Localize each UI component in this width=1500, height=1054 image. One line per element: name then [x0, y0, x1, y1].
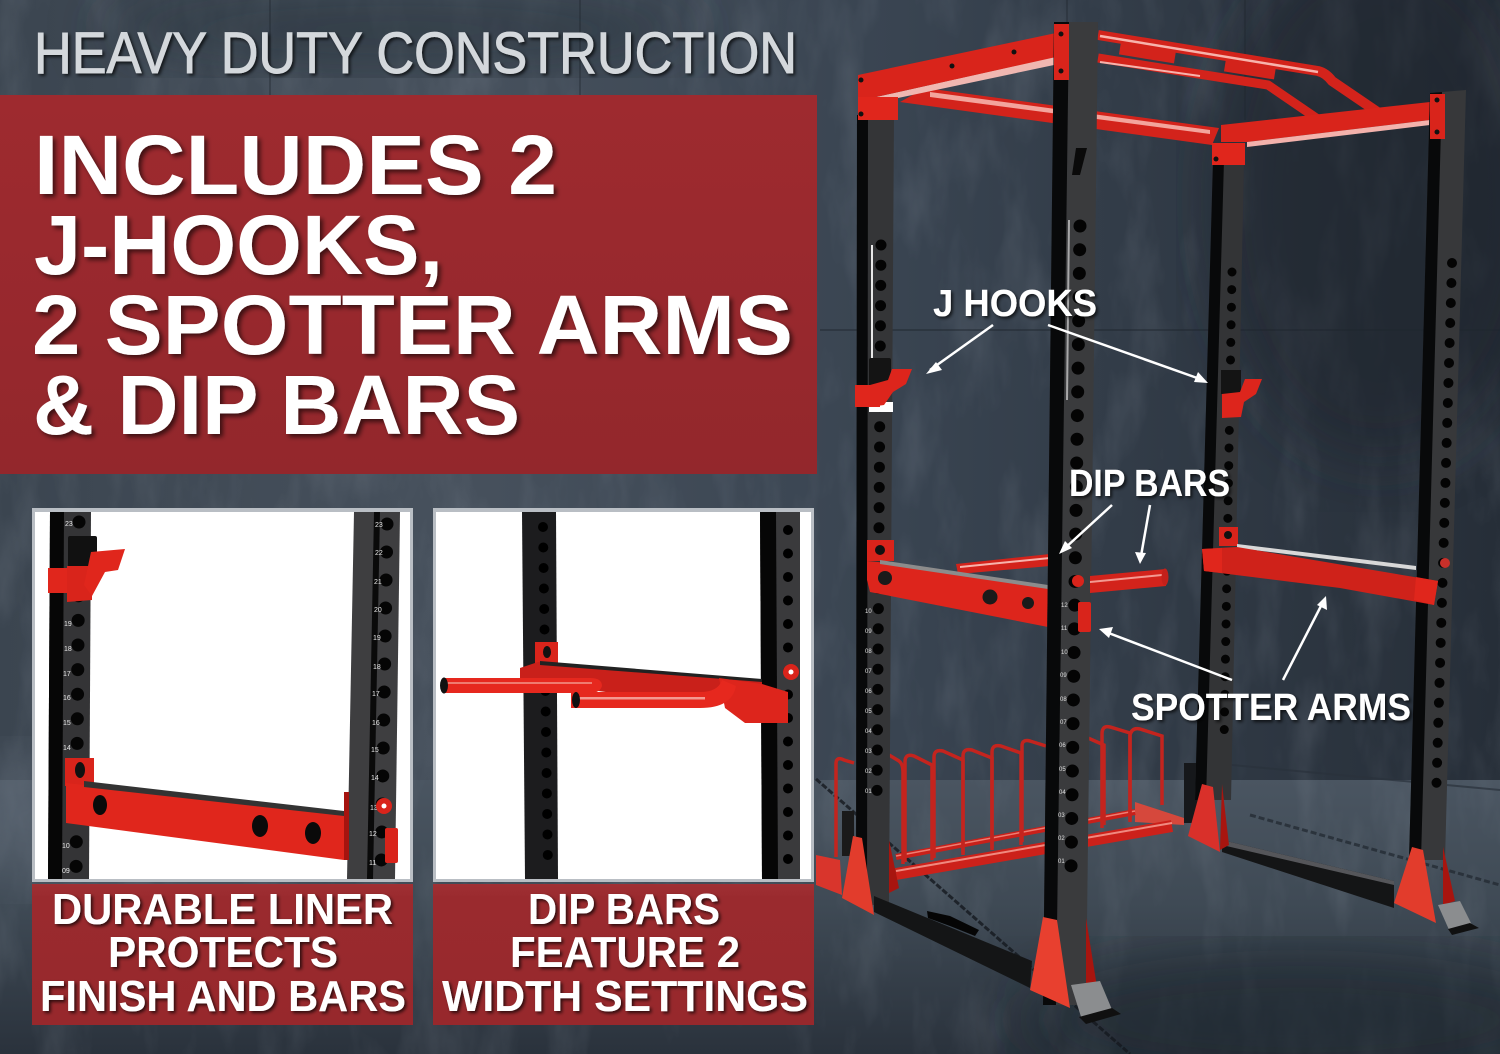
left upright: 15 [63, 720, 71, 727]
right upright: 18 [373, 664, 381, 671]
top right crossbeam [1212, 102, 1430, 165]
front center upright: 03 [1058, 813, 1065, 819]
dip bar arm [867, 540, 1048, 627]
base beams [874, 840, 1394, 988]
label: spotter arms: SPOTTER ARMS [1131, 687, 1411, 729]
left upright: 17 [63, 671, 71, 678]
left upright: 18 [64, 646, 72, 653]
front center upright: 08 [1060, 697, 1067, 703]
left upright: 14 [63, 745, 71, 752]
panel: red headline banner [0, 95, 817, 474]
arrow: dip bars right [1135, 505, 1150, 564]
caption: dip bars: WIDTH SETTINGS [442, 972, 808, 1021]
right upright: 13 [370, 805, 378, 812]
top left beam [858, 33, 1056, 120]
left upright: 10 [62, 843, 70, 850]
left upright: 19 [64, 621, 72, 628]
arrow: dip bars left [1059, 505, 1112, 554]
left upright: 09 [865, 629, 872, 635]
icon: j-hook [48, 536, 125, 602]
caption: dip bars [433, 884, 814, 1025]
right upright: 11 [369, 860, 376, 867]
caption: durable liner: DURABLE LINER [52, 885, 393, 934]
left upright: 10 [865, 609, 872, 615]
right upright: 17 [372, 691, 380, 698]
right upright [347, 512, 400, 880]
front center upright [1043, 22, 1098, 1005]
back top crossbar [900, 88, 1219, 145]
left upright: 05 [865, 709, 872, 715]
front center upright: 11 [1061, 626, 1068, 632]
dip bars back tube [956, 554, 1050, 574]
front center upright: 01 [1058, 859, 1065, 865]
left upright: 04 [865, 729, 872, 735]
right front upright [1409, 90, 1466, 860]
right upright: 20 [374, 607, 382, 614]
right upright: 15 [371, 747, 379, 754]
caption: durable liner: FINISH AND BARS [40, 972, 406, 1021]
panel: dip bars photo [433, 508, 814, 882]
caption: durable liner [32, 884, 413, 1025]
heading: heavy duty construction: HEAVY DUTY CONSTRUCTION [34, 21, 797, 86]
plate storage rack [816, 727, 1202, 895]
left upright: 01 [865, 789, 872, 795]
j-hook left [855, 358, 912, 412]
spotter arm [65, 758, 398, 863]
spotter arm on right [1202, 527, 1450, 605]
left upright: 23 [65, 521, 73, 528]
front center upright: 06 [1059, 743, 1066, 749]
left upright: 07 [865, 669, 872, 675]
left upright: 02 [865, 769, 872, 775]
headline text: 2 SPOTTER ARMS [32, 278, 793, 372]
headline text: & DIP BARS [33, 358, 520, 452]
right upright: 16 [372, 720, 380, 727]
headline text: INCLUDES 2 [34, 118, 557, 212]
front center upright: 12 [1061, 603, 1068, 609]
dip bar front tube [1072, 568, 1168, 632]
label: dip bars: DIP BARS [1069, 463, 1230, 505]
front center upright: 02 [1058, 836, 1065, 842]
dip bar assembly [440, 642, 799, 723]
front center upright: 04 [1059, 790, 1066, 796]
arrow: j hooks right [1048, 325, 1208, 383]
headline text [32, 118, 793, 452]
right upright: 19 [373, 635, 381, 642]
left upright [48, 512, 91, 880]
arrow: spotter arms left [1099, 627, 1232, 680]
j-hook right [1221, 370, 1262, 418]
left upright: 08 [865, 649, 872, 655]
front center upright: 07 [1060, 720, 1067, 726]
right upright: 14 [371, 775, 379, 782]
caption: dip bars: DIP BARS [528, 885, 720, 934]
left upright: 09 [62, 868, 70, 875]
power rack illustration [816, 22, 1479, 1024]
caption: dip bars: FEATURE 2 [510, 928, 740, 977]
arrow: spotter arms right [1283, 596, 1327, 680]
right upright: 22 [375, 550, 383, 557]
left upright: 16 [63, 695, 71, 702]
right upright: 21 [374, 579, 382, 586]
back right upright [1195, 160, 1244, 800]
left upright: 03 [865, 749, 872, 755]
front center upright: 10 [1061, 650, 1068, 656]
left upright [856, 115, 894, 905]
headline text: J-HOOKS, [34, 198, 443, 292]
panel: durable liner photo [32, 508, 413, 882]
right upright: 23 [375, 522, 383, 529]
pull-up bars [1098, 35, 1379, 124]
arrow: j hooks left [926, 325, 993, 374]
caption: durable liner: PROTECTS [108, 928, 338, 977]
left upright [522, 512, 558, 879]
right upright: 12 [369, 831, 377, 838]
label: j hooks: J HOOKS [933, 283, 1097, 325]
front center upright: 09 [1060, 673, 1067, 679]
gussets and feet [842, 784, 1479, 1024]
front center upright: 05 [1059, 767, 1066, 773]
left upright: 06 [865, 689, 872, 695]
arrows [926, 325, 1327, 680]
right upright [760, 512, 800, 879]
